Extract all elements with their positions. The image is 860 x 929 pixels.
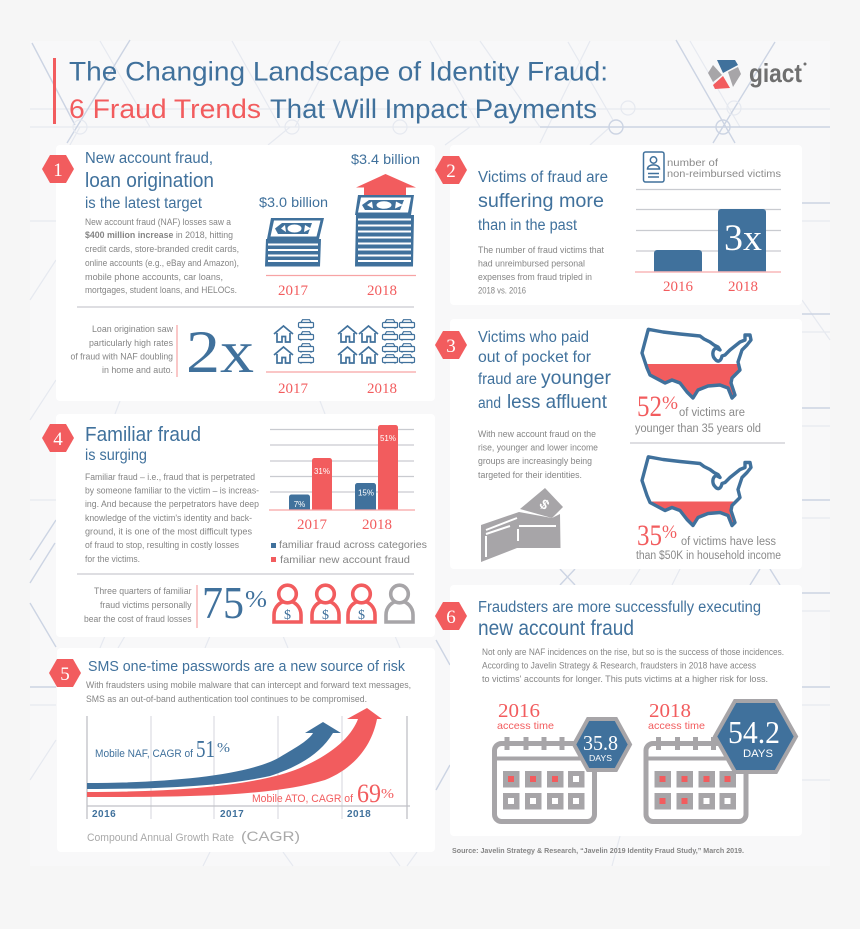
title: That Will Impact Payments (270, 94, 597, 124)
label: 2016 access time: 2016 (498, 700, 540, 722)
icon: money stack 2018 (355, 195, 414, 266)
icons: victims (274, 585, 413, 623)
label: mobile ATO: 69 (357, 779, 381, 808)
panel 5: sms passwords (49, 648, 435, 852)
heading 1: loan origination (85, 170, 214, 192)
arrow: mobile NAF (87, 722, 341, 789)
label: mobile NAF: Mobile NAF, CAGR of (95, 748, 194, 760)
text block 4: of fraud to stop, resulting in costly losses (85, 540, 239, 550)
arrow: increase (356, 174, 416, 195)
heading 4: is surging (85, 447, 147, 464)
logo: giact: giact (749, 58, 802, 88)
heading 3: out of pocket for (478, 349, 591, 366)
heading 4 (85, 424, 201, 464)
text block 4 (85, 472, 259, 564)
icons: homes and autos 2017 (274, 320, 314, 364)
bar chart: familiar fraud: 7% (294, 500, 305, 509)
bar chart: familiar fraud: 51% (380, 434, 396, 443)
text block 5: SMS as an out-of-band authentication tool continues to be compromised. (86, 694, 367, 704)
legend: non-reimbursed victims (667, 157, 781, 180)
heading 3: and (478, 395, 501, 412)
panel 6: new account fraud success (435, 585, 802, 836)
icon: money stack 2017 (265, 218, 324, 266)
axis and years: losses: 2018 (367, 283, 397, 299)
text block: loan origination: in home and auto. (102, 365, 173, 375)
label: $3.4 billion: $3.4 billion (351, 151, 420, 167)
caption: CAGR (87, 828, 300, 844)
text block 5 (86, 680, 411, 704)
arrow: mobile ATO (87, 708, 382, 797)
text block: three quarters: Three quarters of familiar (94, 586, 192, 596)
stat: 52 percent younger: % (662, 393, 678, 414)
badge 3: 3 (446, 336, 456, 357)
icon: calendar 2016 (494, 737, 595, 822)
badge 4 (42, 424, 74, 452)
text block 6 (482, 647, 784, 684)
stat: 52 percent younger: 52 (637, 390, 662, 423)
text block: loan origination (70, 324, 173, 375)
badge: 35.8 days: DAYS (589, 753, 612, 763)
legend: non-reimbursed victims: non-reimbursed victims (667, 168, 781, 180)
label: mobile ATO: % (381, 787, 394, 802)
caption: CAGR: Compound Annual Growth Rate (87, 832, 234, 844)
axis and years: loans (266, 372, 416, 397)
text block: loan origination: of fraud with NAF doubling (70, 352, 173, 362)
axis and years: losses: 2017 (278, 283, 308, 299)
panel 1: new account fraud (42, 145, 435, 401)
bar chart: victims: 2018 (728, 279, 758, 295)
text block 4: knowledge of the victim's identity and back- (85, 513, 252, 523)
badge 2 (435, 156, 467, 184)
stat: 2x: 2x (186, 319, 254, 385)
panel 2: victims suffering more (435, 145, 802, 305)
heading 3: fraud are (478, 371, 537, 388)
title: 6 Fraud Trends (69, 94, 261, 124)
legend: familiar fraud (271, 539, 427, 566)
caption: CAGR: (CAGR) (241, 828, 300, 844)
map: 52 percent (642, 329, 751, 398)
heading 3: Victims who paid (478, 329, 589, 346)
bar chart: familiar fraud: 2017 (297, 517, 328, 533)
heading 4: Familiar fraud (85, 424, 201, 446)
icon: wallet (481, 488, 563, 562)
bar chart: victims (635, 190, 781, 295)
label: mobile NAF (95, 737, 230, 763)
chart: CAGR growth (87, 708, 410, 820)
icon: wallet: $ (537, 496, 553, 513)
bar chart: victims: 2016 (663, 279, 694, 295)
text block 1 (85, 217, 239, 295)
text block 1: mobile phone accounts, car loans, (85, 272, 223, 282)
axis years: 2017 (220, 809, 244, 820)
axis and years: loans: 2017 (278, 381, 308, 397)
text block 3: With new account fraud on the (478, 429, 596, 439)
stat: 52 percent younger (635, 390, 761, 435)
legend: familiar fraud: familiar fraud across categories (279, 539, 427, 551)
text block 6: Not only are NAF incidences on the rise, but so is the success of those incidences. (482, 647, 784, 657)
text block: loan origination: Loan origination saw (92, 324, 173, 334)
text block 1: $400 million increase in 2018, hitting (85, 230, 233, 240)
text block 3: targeted for their identities. (478, 470, 582, 480)
icon: calendar 2018 (646, 737, 746, 822)
bar chart: familiar fraud (269, 425, 415, 533)
stat: 35 percent low income: of victims have less (681, 536, 776, 548)
heading 1 (85, 150, 214, 212)
badge: 35.8 days: 35.8 (583, 731, 618, 755)
text block: three quarters: fraud victims personally (100, 600, 192, 610)
icons: victims: $ (284, 608, 291, 623)
bar chart: victims: 3x (724, 218, 763, 259)
icons: victims: $ (358, 608, 365, 623)
label: $3.0 billion: $3.0 billion (259, 194, 328, 210)
badge: 35.8 days (574, 719, 630, 770)
text block: three quarters: bear the cost of fraud losses (84, 614, 192, 624)
text block 3: groups are increasingly being (478, 456, 592, 466)
label: 2018 access time (648, 700, 705, 732)
text block 3: rise, younger and lower income (478, 442, 598, 452)
badge 1 (42, 155, 74, 183)
text block 2: 2018 vs. 2016 (478, 286, 526, 296)
stat: 35 percent low income: than $50K in household income (636, 550, 781, 562)
badge: 54.2 days: DAYS (743, 748, 773, 760)
heading 2: Victims of fraud are (478, 169, 608, 186)
source note: Source: Javelin Strategy & Research, “Javelin 2019 Identity Fraud Study,” March 2019. (452, 846, 744, 855)
text block 1: New account fraud (NAF) losses saw a (85, 217, 231, 227)
badge: 54.2 days (715, 701, 796, 772)
bar chart: familiar fraud: 15% (358, 488, 374, 498)
text block 6: According to Javelin Strategy & Research, fraudsters in 2018 have access (482, 660, 756, 670)
text block 2: The number of fraud victims that (478, 245, 604, 255)
map: 35 percent (642, 457, 751, 526)
heading 5: SMS one-time passwords are a new source of risk (88, 658, 405, 675)
badge 1: 1 (53, 160, 63, 181)
heading 6: Fraudsters are more successfully executing (478, 599, 761, 616)
badge: 54.2 days: 54.2 (728, 714, 780, 750)
text block 1: mortgages, student loans, and HELOCs. (85, 285, 237, 295)
text block 2: had unreimbursed personal (478, 258, 585, 268)
axis years: 2018 (347, 809, 371, 820)
icons: homes and autos 2018 (338, 320, 414, 364)
stat: 35 percent low income: 35 (637, 519, 662, 552)
title (53, 56, 608, 124)
stat: 75 percent: % (245, 587, 267, 613)
label: mobile NAF: % (217, 741, 230, 756)
icon: victim id card (644, 152, 664, 182)
heading 2: suffering more (478, 190, 604, 212)
panel 3: younger and less affluent (435, 319, 802, 569)
text block 4: by someone familiar to the victim – is increas- (85, 486, 259, 496)
heading 6 (478, 599, 761, 640)
heading 3: less affluent (507, 391, 608, 413)
heading 6: new account fraud (478, 617, 634, 640)
text block 4: ing. And because the perpetrators have deep (85, 499, 259, 509)
text block 3 (478, 429, 598, 480)
heading 1: is the latest target (85, 195, 203, 212)
legend: non-reimbursed victims: number of (667, 157, 718, 169)
text block: loan origination: particularly high rates (89, 338, 173, 348)
stat: 52 percent younger: younger than 35 years old (635, 423, 761, 435)
label: mobile ATO (252, 779, 394, 808)
stat: 75 percent (202, 578, 267, 628)
badge 6: 6 (446, 607, 456, 628)
stat: 35 percent low income: % (662, 522, 677, 543)
axis and years: losses (266, 276, 416, 299)
text block 2: expenses from fraud tripled in (478, 272, 592, 282)
text block 4: Familiar fraud – i.e., fraud that is perpetrated (85, 472, 255, 482)
text block 1: online accounts (e.g., eBay and Amazon), (85, 258, 239, 268)
text block 5: With fraudsters using mobile malware that can intercept and forward text messages, (86, 680, 411, 690)
logo: giact (708, 58, 806, 89)
text block 4: for the victims. (85, 554, 140, 564)
heading 2: than in the past (478, 217, 578, 234)
stat: 35 percent low income (636, 519, 781, 562)
bar chart: familiar fraud: 2018 (362, 517, 392, 533)
label: mobile NAF: 51 (196, 737, 215, 763)
icons: victims: $ (322, 608, 329, 623)
label: 2018 access time: access time (648, 720, 705, 732)
label: 2018 access time: 2018 (649, 700, 691, 722)
label: 2016 access time (497, 700, 554, 732)
text block 1: credit cards, store-branded credit cards, (85, 244, 239, 254)
axis and years: loans: 2018 (367, 381, 397, 397)
bar chart: familiar fraud: 31% (314, 467, 330, 476)
title: The Changing Landscape of Identity Fraud: (69, 56, 608, 86)
axis years (92, 809, 371, 820)
heading 3 (478, 329, 612, 413)
badge 4: 4 (53, 429, 63, 450)
label: mobile ATO: Mobile ATO, CAGR of (252, 793, 354, 805)
stat: 52 percent younger: of victims are (679, 407, 745, 419)
heading 1: New account fraud, (85, 150, 213, 167)
heading 3: younger (541, 367, 612, 389)
text block: three quarters (84, 586, 192, 624)
label: 2016 access time: access time (497, 720, 554, 732)
text block 2 (478, 245, 604, 296)
text block 4: ground, it is one of the most difficult types (85, 526, 252, 536)
badge 6 (435, 602, 467, 630)
stat: 75 percent: 75 (202, 578, 244, 628)
legend: familiar fraud: familiar new account fraud (280, 554, 410, 566)
text block 6: to victims' accounts for longer. This puts victims at a higher risk for loss. (482, 674, 768, 684)
badge 2: 2 (446, 161, 456, 182)
panel 4: familiar fraud (42, 414, 435, 637)
heading 2 (478, 169, 608, 234)
axis years: 2016 (92, 809, 116, 820)
badge 5 (49, 659, 81, 687)
badge 3 (435, 331, 467, 359)
badge 5: 5 (60, 664, 70, 685)
